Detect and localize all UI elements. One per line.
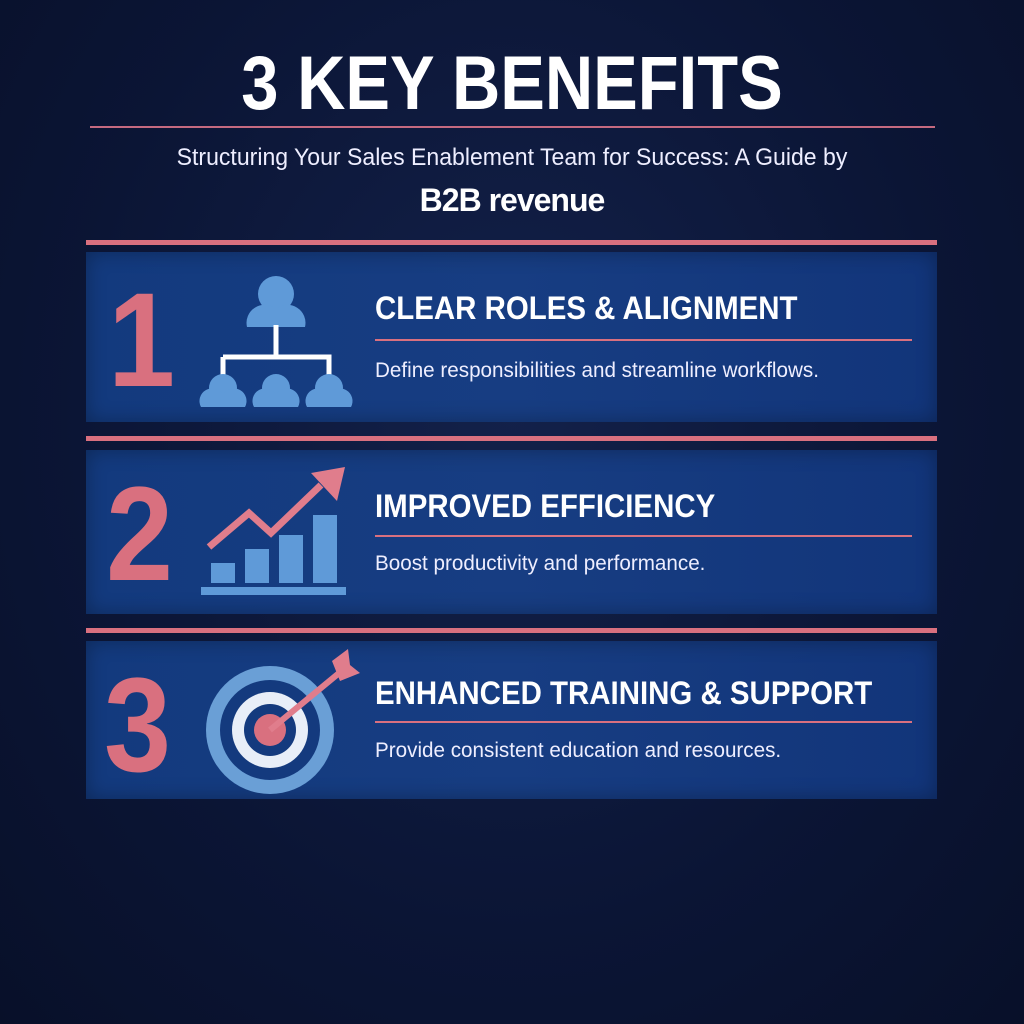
icon: org chart (200, 276, 352, 407)
subtitle: Structuring Your Sales Enablement Team for Success: A Guide by (177, 144, 847, 171)
panel: efficiency (86, 450, 937, 614)
panel: clear roles (86, 252, 937, 422)
description 1: Define responsibilities and streamline workflows. (375, 358, 819, 382)
description 3: Provide consistent education and resources. (375, 738, 781, 762)
number 2: 2 (106, 460, 173, 609)
heading 2: IMPROVED EFFICIENCY (375, 488, 715, 524)
icon: target (206, 649, 360, 794)
number 1: 1 (108, 266, 175, 415)
heading 3: ENHANCED TRAINING & SUPPORT (375, 675, 872, 711)
heading 1: CLEAR ROLES & ALIGNMENT (375, 290, 798, 326)
icon: growth chart (201, 467, 346, 595)
brand: B2B revenue (420, 182, 604, 218)
title: 3 KEY BENEFITS (241, 41, 783, 126)
description 2: Boost productivity and performance. (375, 551, 705, 575)
number 3: 3 (104, 651, 171, 800)
panel: training (86, 641, 937, 799)
